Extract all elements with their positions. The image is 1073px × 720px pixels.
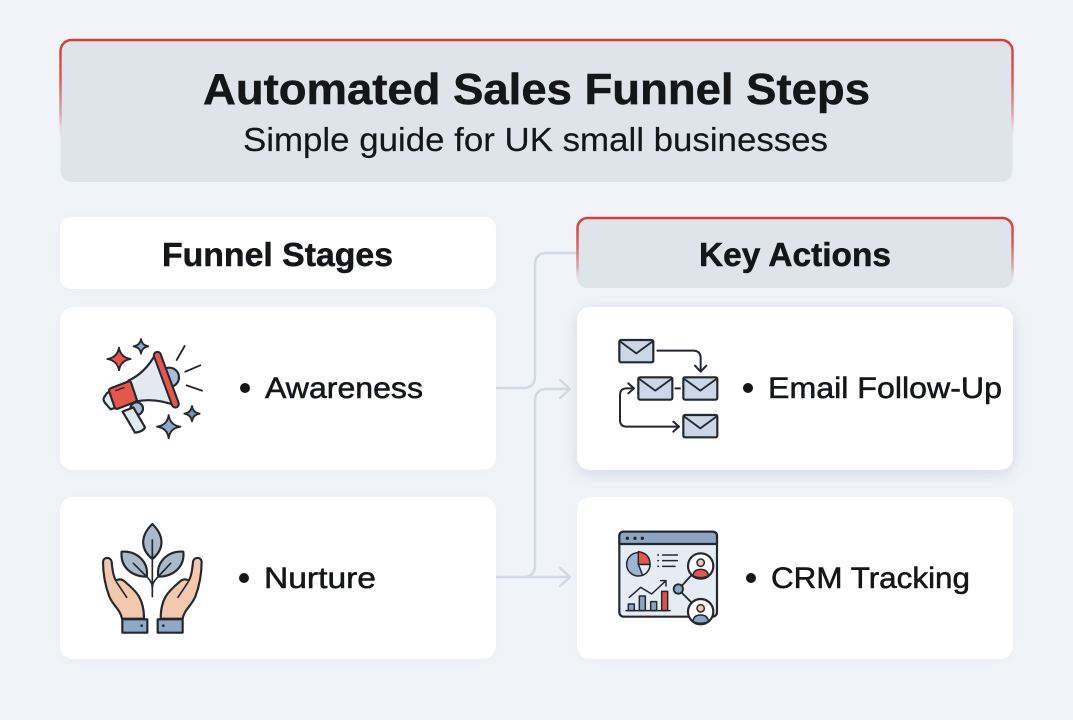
title panel bbox=[60, 40, 1012, 182]
bullet bbox=[743, 383, 753, 393]
label: awareness: Awareness bbox=[265, 372, 423, 405]
panel: nurture bbox=[60, 497, 496, 659]
heading: key actions: Key Actions bbox=[699, 236, 891, 273]
panel: key actions heading bbox=[578, 218, 1012, 288]
title: Automated Sales Funnel Steps bbox=[203, 65, 870, 114]
icon: email flow bbox=[619, 340, 717, 437]
bullet bbox=[746, 573, 756, 583]
panel: funnel stages heading bbox=[60, 217, 496, 289]
icon: crm dashboard bbox=[619, 532, 717, 624]
label: email follow-up: Email Follow-Up bbox=[768, 372, 1002, 405]
bullet bbox=[239, 573, 249, 583]
bullet bbox=[240, 383, 250, 393]
label: nurture: Nurture bbox=[264, 562, 376, 595]
connector arrows bbox=[496, 253, 578, 586]
icon: megaphone bbox=[104, 339, 202, 438]
label: crm tracking: CRM Tracking bbox=[771, 562, 970, 595]
panel: email follow-up bbox=[577, 307, 1013, 470]
icon: hands with plant bbox=[103, 524, 202, 633]
heading: funnel stages: Funnel Stages bbox=[162, 236, 393, 273]
subtitle: Simple guide for UK small businesses bbox=[243, 121, 828, 158]
panel: awareness bbox=[60, 307, 496, 470]
panel: crm tracking bbox=[577, 497, 1013, 659]
